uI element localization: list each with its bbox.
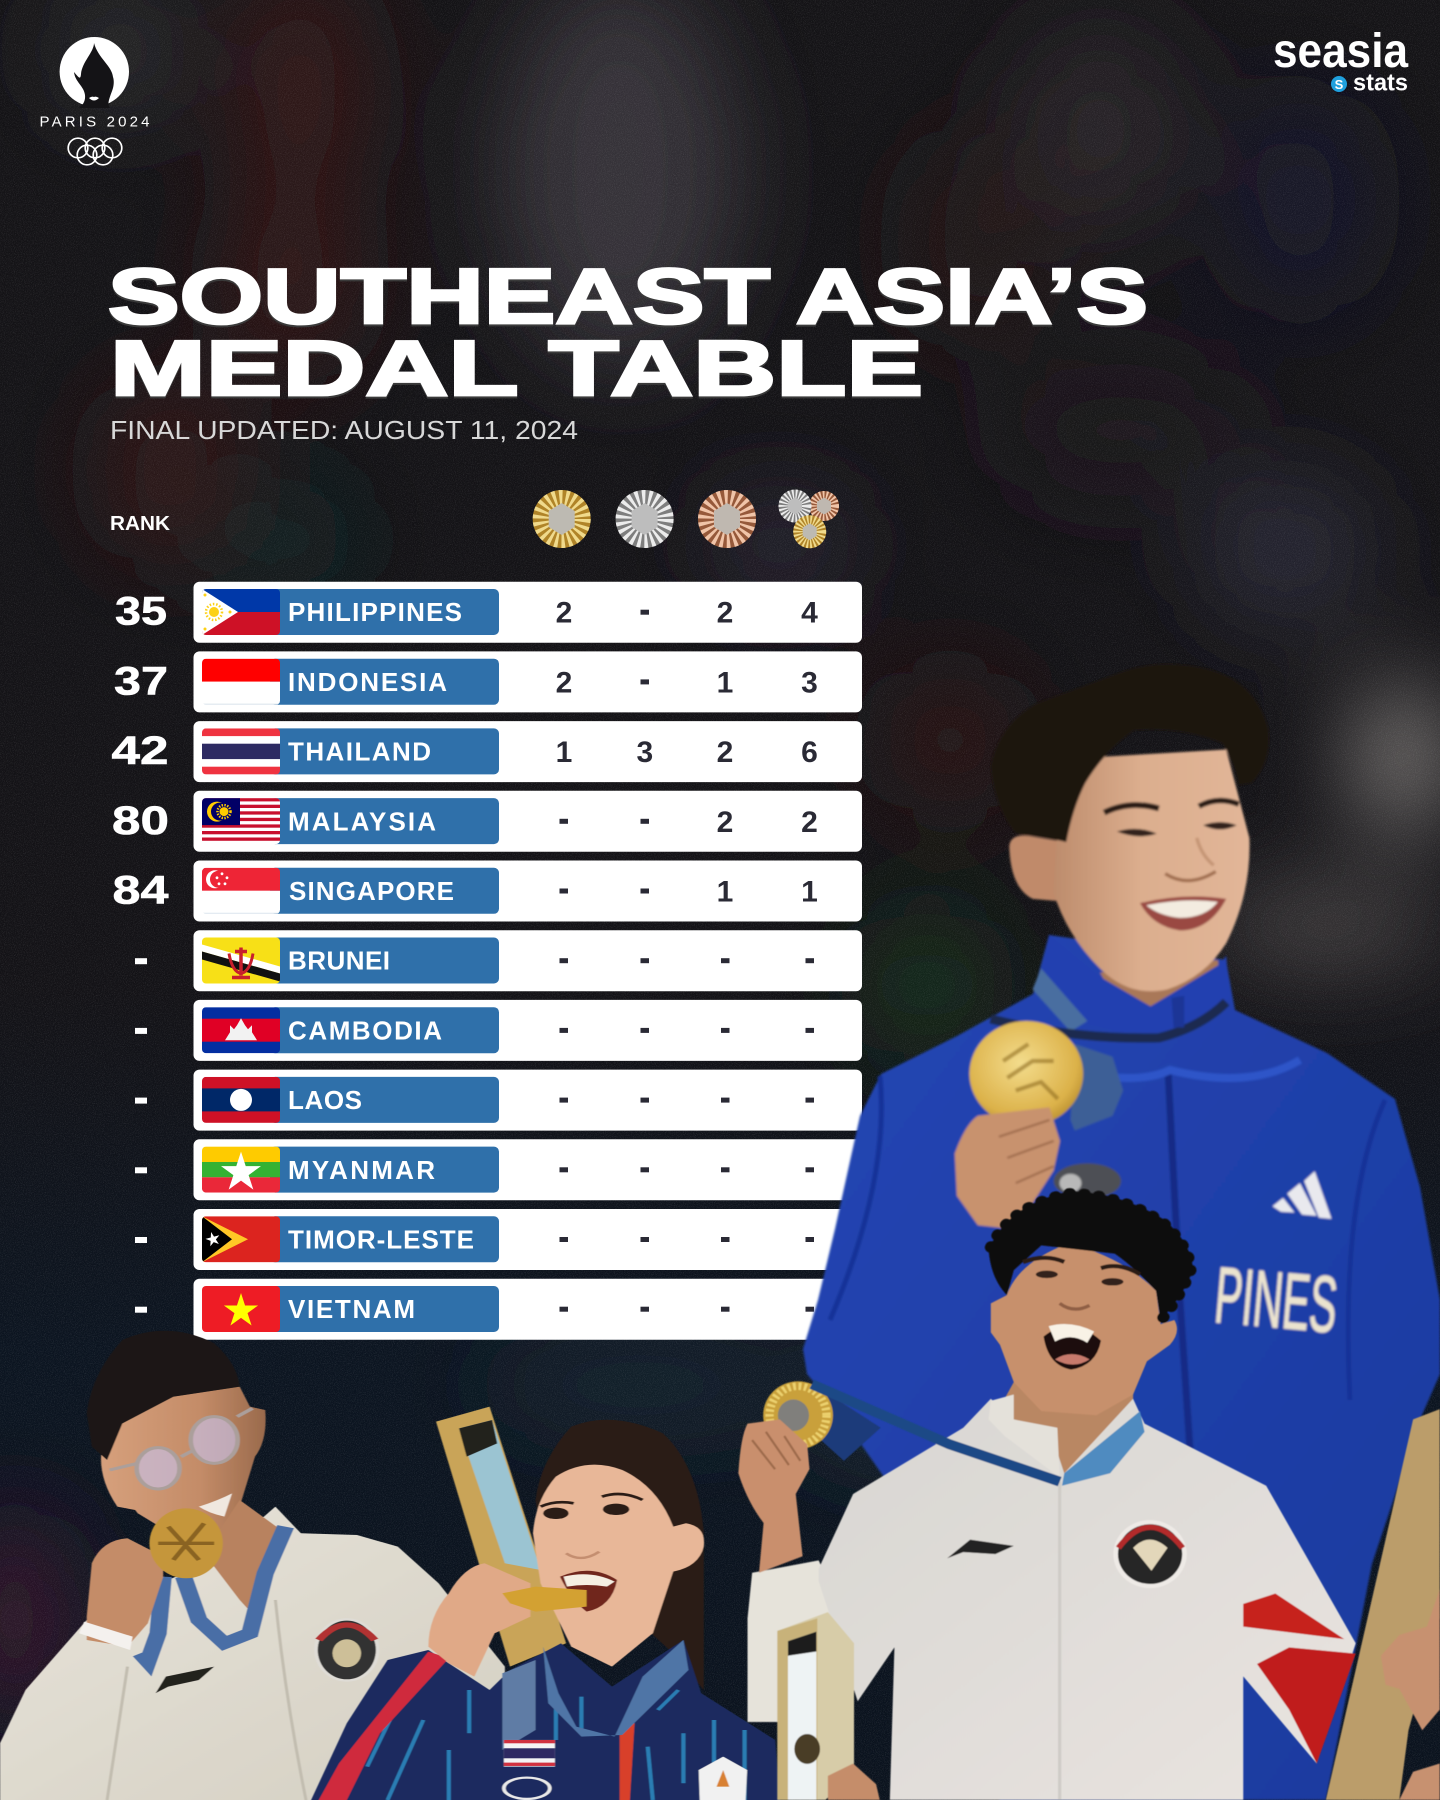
hair [536, 1420, 704, 1690]
icon: total medals cluster [778, 490, 839, 548]
row: Thailand: 2 [717, 736, 733, 769]
flag patch [504, 1740, 555, 1767]
medal table [112, 582, 862, 1340]
hair [87, 1331, 240, 1460]
trophy box [436, 1407, 566, 1667]
open mouth [1044, 1326, 1101, 1370]
row: Myanmar [135, 1139, 862, 1200]
row: Thailand [112, 721, 862, 782]
jacket [0, 1507, 505, 1800]
text: Paris 2024: PARIS 2024 [40, 114, 150, 130]
icon: flame [60, 37, 129, 108]
hair [989, 1191, 1193, 1320]
brand logo [156, 1667, 214, 1693]
row: Indonesia: 2 [556, 666, 572, 699]
row: Singapore: 1 [717, 876, 733, 908]
row: Cambodia [135, 1000, 862, 1061]
mouth [560, 1571, 617, 1612]
logo: seasia stats: seasia [1273, 25, 1408, 78]
logo: seasia stats: stats [1353, 70, 1408, 96]
row: Philippines: 4 [801, 597, 818, 630]
athlete: Thailand taekwondo [311, 1407, 780, 1800]
medal [969, 1021, 1083, 1126]
row: Malaysia [112, 791, 862, 852]
hand [955, 1107, 1060, 1229]
row: Indonesia [114, 651, 862, 712]
row: Cambodia: CAMBODIA [288, 1015, 442, 1045]
row: Malaysia: 2 [801, 806, 818, 839]
row: Philippines: 2 [556, 597, 572, 630]
logo: seasia stats [1273, 25, 1408, 96]
row: Vietnam [135, 1279, 862, 1340]
face features [1023, 1258, 1140, 1274]
row: Indonesia: 37 [114, 659, 168, 703]
neck [995, 1382, 1133, 1473]
red stripe [319, 1652, 449, 1800]
brand logo [947, 1540, 1014, 1558]
row: Myanmar: MYANMAR [288, 1155, 435, 1185]
face [991, 1243, 1177, 1415]
team patch [314, 1618, 379, 1682]
row: Philippines [115, 582, 862, 643]
team badge [699, 1757, 747, 1800]
jacket [803, 935, 1440, 1800]
row: Timor-Leste: TIMOR-LESTE [288, 1224, 474, 1254]
row: Thailand: THAILAND [288, 737, 431, 767]
row: Philippines: 35 [115, 590, 167, 634]
icon: bronze medal [698, 490, 756, 548]
row: Thailand: 3 [636, 736, 653, 769]
row: Malaysia: 80 [112, 799, 169, 843]
athlete: Philippines gymnast [803, 664, 1440, 1800]
face features [1104, 805, 1159, 813]
row: Indonesia: 3 [801, 666, 818, 699]
logo: Paris 2024 [40, 37, 150, 165]
athlete: Indonesia weightlifter [738, 1191, 1440, 1800]
ribbon [812, 1384, 1060, 1482]
row: Thailand: 1 [556, 736, 572, 769]
row: Malaysia: 2 [717, 806, 733, 839]
jacket [311, 1640, 780, 1800]
collar and lanyard [1037, 935, 1230, 1032]
hand [428, 1563, 530, 1677]
column header: rank: RANK [110, 513, 171, 535]
lanyard back [816, 1386, 881, 1461]
hand [87, 1538, 163, 1647]
row: Philippines: 2 [717, 597, 733, 630]
sleeve [748, 1560, 858, 1722]
row: Timor-Leste [135, 1209, 862, 1270]
head and hair [1100, 960, 1222, 1019]
eyes and brows [541, 1494, 643, 1507]
title: MEDAL TABLE [110, 324, 923, 412]
row: Indonesia: 1 [717, 666, 733, 699]
row: Brunei: BRUNEI [288, 946, 390, 976]
row: Laos [135, 1070, 862, 1131]
brand logo [504, 1778, 550, 1799]
adidas logo [1273, 1171, 1332, 1219]
medal [763, 1381, 833, 1449]
lanyard [140, 1527, 286, 1662]
row: Singapore [112, 860, 862, 922]
icon: gold medal [533, 490, 591, 548]
row: Indonesia: INDONESIA [288, 667, 447, 697]
row: Malaysia: MALAYSIA [288, 806, 436, 836]
jacket [819, 1399, 1356, 1800]
hand [738, 1419, 810, 1573]
icon: blue coin: S [1335, 77, 1344, 92]
row: Brunei [135, 930, 862, 991]
row: Singapore: 1 [801, 876, 818, 908]
row: Laos: LAOS [288, 1085, 362, 1115]
face [101, 1387, 266, 1553]
red arm band [1243, 1594, 1344, 1639]
silver medal behind head [1054, 1163, 1121, 1199]
title: SOUTHEAST ASIA’S [108, 252, 1148, 340]
small trophy box [777, 1612, 854, 1800]
title [108, 252, 1148, 412]
lanyard [502, 1660, 536, 1750]
row: Singapore: 84 [112, 868, 169, 912]
row: Thailand: 6 [801, 736, 818, 769]
right hand [1381, 1589, 1440, 1730]
hand on small box [828, 1763, 880, 1800]
row: Singapore: SINGAPORE [289, 876, 454, 906]
wristband [79, 1622, 133, 1650]
face [533, 1465, 704, 1667]
team patch [1113, 1520, 1187, 1588]
athlete: Indonesia climber with glasses [0, 1331, 505, 1800]
row: Philippines: PHILIPPINES [288, 597, 462, 627]
subtitle: update date: FINAL UPDATED: AUGUST 11, 2024 [110, 415, 578, 445]
large trophy box [1326, 1409, 1440, 1800]
medal [149, 1508, 223, 1578]
glasses [137, 1417, 238, 1489]
row: Thailand: 42 [112, 729, 168, 773]
icon: olympic rings [68, 138, 122, 165]
icon: silver medal [616, 490, 674, 548]
row: Vietnam: VIETNAM [288, 1294, 415, 1324]
medal [502, 1587, 586, 1612]
